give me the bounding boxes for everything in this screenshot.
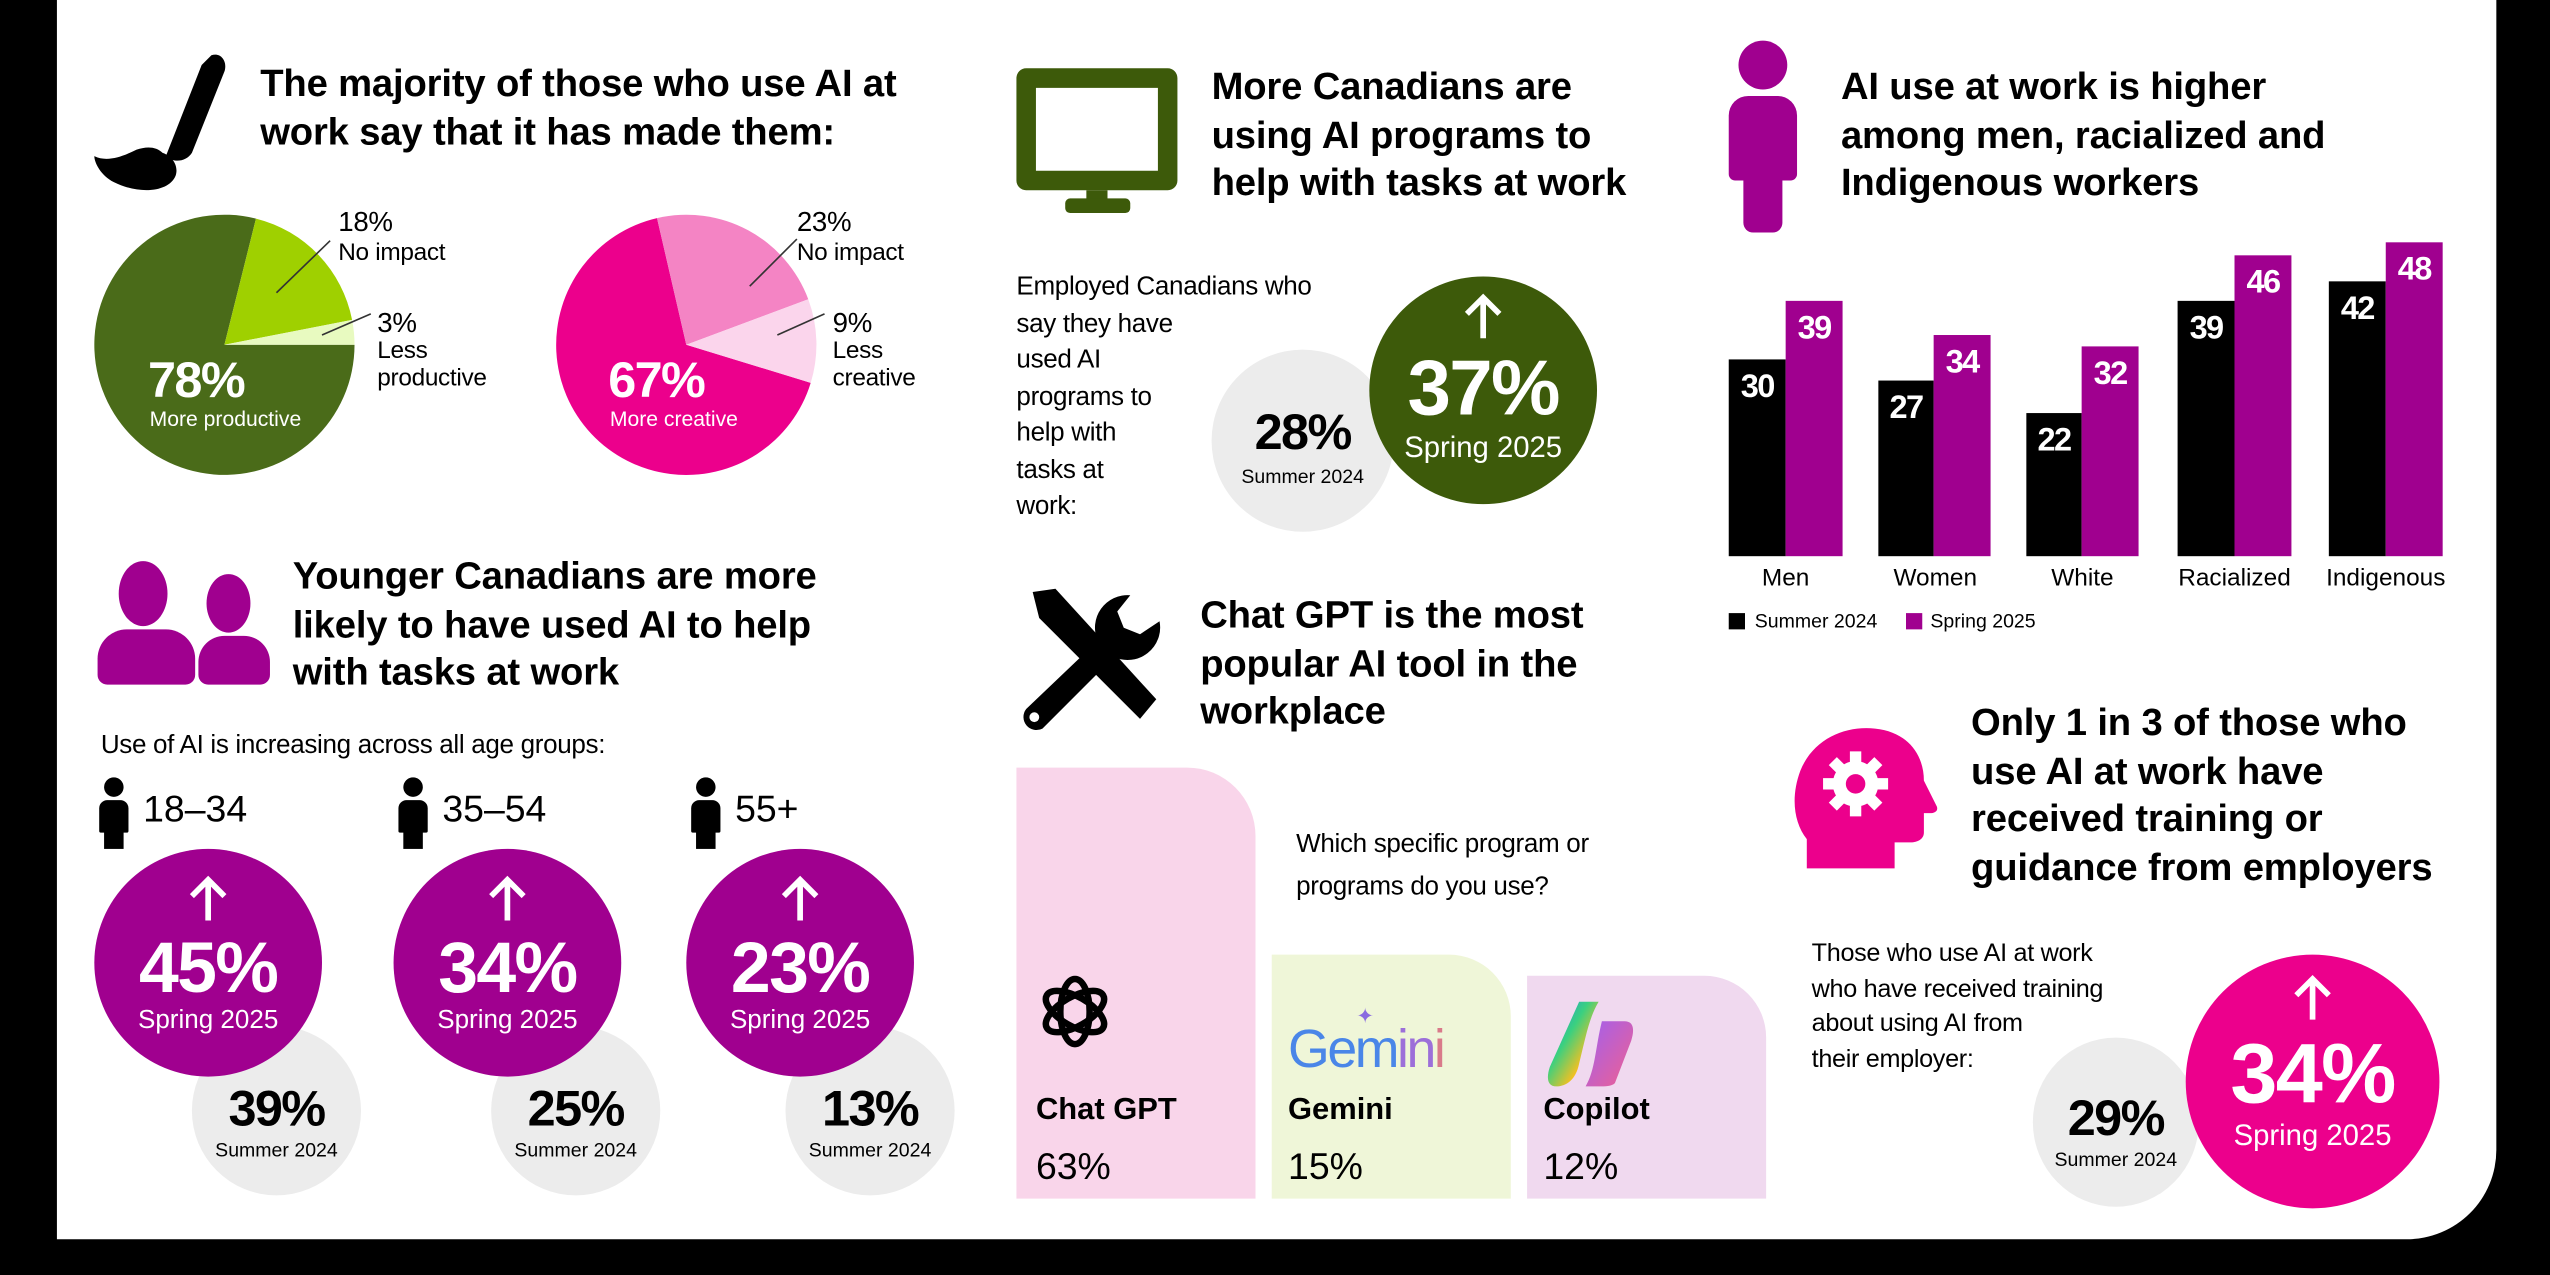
card: Copilot: Copilot [1543, 1093, 1650, 1127]
bar chart: groups [1728, 242, 2445, 633]
pie chart: productivity: 18% [338, 207, 393, 237]
text: training: who have received training [1812, 975, 2103, 1003]
pie chart: creativity: 67% [608, 351, 704, 408]
bar chart: groups: 42 [2341, 291, 2374, 327]
text: training: their employer: [1812, 1045, 1974, 1073]
card: Copilot: 12% [1543, 1145, 1618, 1187]
text: employed Canadians: used AI [1016, 346, 1101, 374]
bar chart: groups: 34 [1946, 345, 1979, 381]
heading: younger Canadians: Younger Canadians are more [293, 555, 817, 597]
heading: training: guidance from employers [1971, 845, 2432, 887]
heading: younger Canadians: likely to have used AI to help [293, 603, 811, 645]
card: Chat GPT [1016, 768, 1255, 1199]
circles: 28% vs 37%: 37% [1407, 346, 1559, 433]
text: question: programs do you use? [1296, 873, 1549, 901]
circles: 28% vs 37%: Spring 2025 [1404, 431, 1562, 463]
heading: training: Only 1 in 3 of those who [1971, 701, 2407, 743]
circles: 29% vs 34%: Spring 2025 [2234, 1119, 2391, 1151]
bar chart: groups: Summer 2024 [1755, 610, 1877, 633]
circles: 28% vs 37% [1212, 276, 1597, 532]
pie chart: productivity: 3% [377, 307, 417, 338]
heading: AI use higher [1841, 65, 2325, 203]
icon: monitor [1016, 68, 1178, 213]
pie chart: creativity: 23% [797, 207, 851, 237]
text: training: about using AI from [1812, 1010, 2023, 1038]
pie chart: productivity: 78% [148, 351, 244, 408]
text: employed Canadians: say they have [1016, 310, 1173, 337]
circles: 28% vs 37%: 28% [1255, 403, 1351, 460]
pie chart: productivity: productive [377, 364, 487, 392]
pie chart: creativity: Less [833, 337, 883, 364]
age group: 35-54: Spring 2025 [437, 1007, 578, 1034]
card: Gemini [1272, 955, 1511, 1199]
bar chart: groups: Men [1762, 564, 1809, 592]
text: employed Canadians: help with [1016, 420, 1116, 447]
card: Gemini: 15% [1288, 1145, 1363, 1187]
card: Gemini: Gemini [1288, 1018, 1443, 1078]
icon: head with gear [1794, 728, 1938, 868]
card: Gemini: Gemini [1288, 1093, 1393, 1127]
text: employed Canadians: Employed Canadians who [1016, 273, 1312, 301]
text: question [1296, 831, 1589, 901]
icon: paint brush [94, 54, 226, 190]
text: training: Those who use AI at work [1812, 940, 2093, 968]
bar chart: groups: 22 [2038, 423, 2070, 459]
age group: 18-34: 18–34 [143, 787, 247, 829]
heading: Chat GPT popular: Chat GPT is the most [1200, 594, 1583, 636]
circles: 28% vs 37%: Summer 2024 [1241, 465, 1364, 488]
bar chart: groups: 30 [1741, 369, 1774, 405]
icon: two people [98, 561, 270, 685]
text: employed Canadians: tasks at [1016, 456, 1104, 484]
age group: 35-54: 25% [528, 1080, 624, 1137]
heading: training [1971, 701, 2432, 888]
text: employed Canadians [1016, 273, 1312, 520]
heading: more Canadians: help with tasks at work [1212, 161, 1626, 203]
pie chart: creativity: creative [833, 364, 915, 392]
bar chart: groups: 39 [2190, 311, 2223, 346]
heading: training: use AI at work have [1971, 749, 2323, 791]
age group: 55+: Summer 2024 [809, 1138, 931, 1161]
heading: younger Canadians: with tasks at work [293, 651, 619, 693]
age group: 55+: Spring 2025 [730, 1007, 870, 1034]
text: employed Canadians: programs to [1016, 383, 1152, 411]
bar chart: groups: Racialized [2178, 564, 2291, 592]
text: age groups intro: Use of AI is increasing across all age groups: [101, 732, 605, 759]
pie chart: productivity: Less [377, 337, 428, 364]
circles: 29% vs 34%: 29% [2068, 1090, 2164, 1147]
heading: productivity: work say that it has made them: [260, 110, 835, 152]
card: Copilot [1527, 976, 1766, 1199]
age group: 18-34: Summer 2024 [215, 1138, 338, 1161]
bar chart: groups: White [2051, 564, 2114, 592]
bar chart: groups: 32 [2094, 356, 2127, 392]
age group: 18-34 [94, 777, 361, 1196]
pie chart: creativity: 9% [833, 307, 872, 338]
bar chart: groups: 27 [1890, 390, 1922, 426]
age group: 55+: 13% [822, 1080, 918, 1137]
age group: 18-34: 45% [139, 929, 277, 1008]
circles: 29% vs 34%: 34% [2230, 1028, 2395, 1122]
heading: Chat GPT popular [1200, 594, 1584, 732]
bar chart: groups: Spring 2025 [1930, 610, 2036, 633]
bar chart: groups: Indigenous [2326, 564, 2445, 592]
heading: more Canadians: More Canadians are [1212, 65, 1572, 107]
pie chart: productivity: More productive [150, 407, 301, 431]
heading: Chat GPT popular: workplace [1200, 690, 1386, 732]
age group: 35-54: 34% [438, 929, 577, 1008]
age group: 18-34: 39% [228, 1080, 324, 1137]
heading: Chat GPT popular: popular AI tool in the [1200, 642, 1577, 684]
pie chart: productivity [94, 207, 487, 475]
icon: OpenAI logo [1042, 976, 1108, 1048]
age group: 35-54: Summer 2024 [514, 1138, 637, 1161]
bar chart: groups: 48 [2398, 252, 2431, 288]
age group: 55+ [686, 777, 954, 1196]
bar chart: groups: 46 [2247, 265, 2279, 301]
icon: person purple [1728, 40, 1798, 232]
age group: 18-34: Spring 2025 [138, 1007, 278, 1034]
circles: 29% vs 34%: Summer 2024 [2054, 1148, 2177, 1171]
heading: younger Canadians [292, 555, 817, 693]
heading: training: received training or [1971, 797, 2323, 839]
heading: AI use higher: AI use at work is higher [1841, 65, 2266, 107]
icon: tools [1023, 588, 1160, 730]
circles: 29% vs 34% [2033, 954, 2440, 1208]
bar chart: groups: Women [1893, 564, 1977, 592]
heading: more Canadians [1212, 65, 1626, 203]
text: training [1812, 940, 2103, 1073]
age group: 35-54 [394, 777, 660, 1196]
card: Chat GPT: 63% [1036, 1145, 1111, 1187]
pie chart: creativity: No impact [797, 239, 904, 267]
card: Gemini: ✦ [1356, 1003, 1374, 1028]
pie chart: creativity [556, 207, 915, 475]
bar chart: groups: 39 [1798, 311, 1831, 346]
pie chart: productivity: No impact [338, 239, 445, 267]
heading: AI use higher: Indigenous workers [1841, 161, 2199, 203]
age group: 55+: 23% [731, 929, 869, 1008]
heading: productivity: The majority of those who use AI at [260, 62, 897, 104]
text: question: Which specific program or [1296, 831, 1589, 859]
heading: more Canadians: using AI programs to [1212, 113, 1591, 155]
heading: productivity [260, 62, 897, 152]
text: employed Canadians: work: [1016, 493, 1077, 520]
pie chart: creativity: More creative [610, 407, 738, 431]
heading: AI use higher: among men, racialized and [1841, 113, 2325, 155]
age group: 55+: 55+ [735, 787, 799, 829]
age group: 35-54: 35–54 [442, 787, 546, 829]
card: Chat GPT: Chat GPT [1036, 1093, 1177, 1127]
